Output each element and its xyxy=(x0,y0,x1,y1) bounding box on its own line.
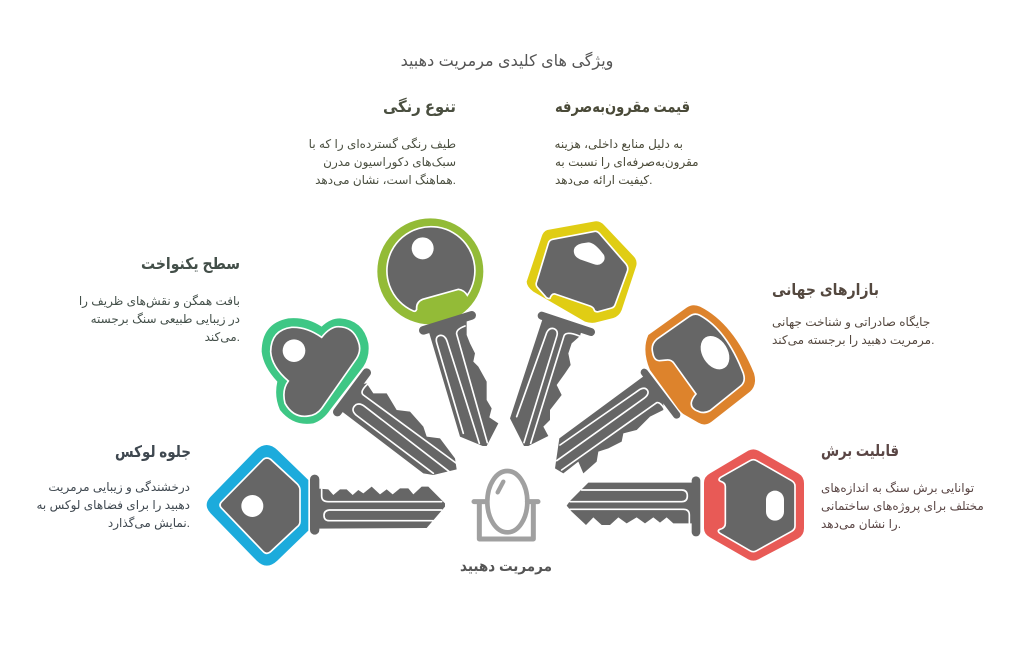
text block: global markets: .مرمریت دهبید را برجسته می‌کند xyxy=(772,333,934,348)
label: central topic: مرمریت دهبید xyxy=(460,558,552,575)
heading: global markets: بازارهای جهانی xyxy=(772,282,879,299)
text block: color variety: سبک‌های دکوراسیون مدرن xyxy=(323,155,456,170)
icon: orange rounded key xyxy=(555,305,755,473)
heading: uniform surface: سطح یکنواخت xyxy=(141,256,240,273)
heading: cutting ability: قابلیت برش xyxy=(821,443,899,460)
icon: red hexagonal key xyxy=(567,449,804,561)
text block: luxury look: .نمایش می‌گذارد xyxy=(108,516,190,531)
title: ویژگی های کلیدی مرمریت دهبید xyxy=(401,51,613,71)
panel: affordable price xyxy=(554,99,699,188)
text block: affordable price xyxy=(554,137,699,188)
icon: central mirror xyxy=(474,471,538,539)
text block: luxury look xyxy=(36,480,190,531)
panel: color variety xyxy=(309,97,456,187)
text block: uniform surface xyxy=(79,294,240,344)
icon: yellow hexagonal key xyxy=(510,221,637,446)
text block: uniform surface: بافت همگن و نقش‌های ظریف را xyxy=(79,294,240,309)
icon: blue diamond key xyxy=(207,445,445,566)
heading: luxury look: جلوه لوکس xyxy=(115,444,191,461)
text block: global markets: جایگاه صادراتی و شناخت جهانی xyxy=(772,315,930,330)
text block: color variety: طیف رنگی گسترده‌ای را که با xyxy=(309,137,456,152)
text block: luxury look: درخشندگی و زیبایی مرمریت xyxy=(48,480,190,495)
icon: green trefoil key xyxy=(262,318,457,475)
text block: uniform surface: در زیبایی طبیعی سنگ برجسته xyxy=(91,312,240,327)
text block: affordable price: به دلیل منابع داخلی، هزینه xyxy=(554,137,683,152)
text block: uniform surface: .می‌کند xyxy=(205,330,240,344)
text block: cutting ability xyxy=(821,481,984,532)
panel: luxury look xyxy=(36,444,191,531)
text block: color variety xyxy=(309,137,456,187)
icon: olive green round key xyxy=(377,218,498,446)
heading: color variety: تنوع رنگی xyxy=(383,97,456,116)
panel: cutting ability xyxy=(821,443,984,532)
panel: uniform surface xyxy=(79,256,240,344)
text block: cutting ability: .را نشان می‌دهد xyxy=(821,517,901,532)
text block: luxury look: دهبید را برای فضاهای لوکس به xyxy=(36,498,190,513)
panel: global markets xyxy=(772,282,934,348)
text block: cutting ability: توانایی برش سنگ به اندازه‌های xyxy=(821,481,974,496)
text block: affordable price: مقرون‌به‌صرفه‌ای را نسبت به xyxy=(555,155,699,170)
heading: affordable price: قیمت مقرون‌به‌صرفه xyxy=(555,99,690,116)
text block: global markets xyxy=(772,315,934,348)
text block: color variety: .هماهنگ است، نشان می‌دهد xyxy=(315,173,456,187)
text block: cutting ability: مختلف برای پروژه‌های ساختمانی xyxy=(821,499,984,514)
text block: affordable price: .کیفیت ارائه می‌دهد xyxy=(555,173,652,188)
